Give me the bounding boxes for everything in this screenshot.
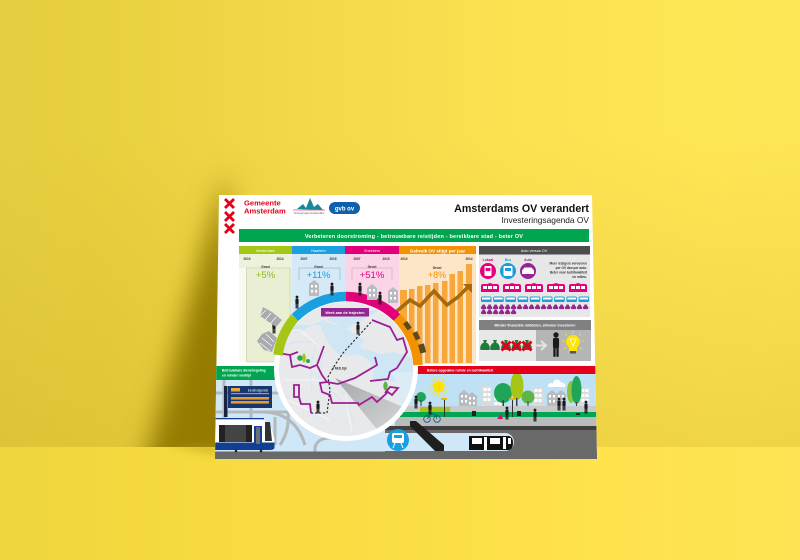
icon: metro badge <box>387 429 409 451</box>
icon: money bags <box>480 340 532 350</box>
label: Werk aan de trajecten: Werk aan de trajecten <box>325 311 365 315</box>
illustration: solar panel in lime column <box>260 307 282 327</box>
sky <box>405 374 600 414</box>
background: yellow wall <box>0 0 800 448</box>
pictogram: row of buses <box>481 296 589 302</box>
arrow <box>535 341 546 350</box>
logo: GVB pill: gvb ov <box>335 206 355 212</box>
grass <box>400 412 600 417</box>
pictogram: rows of cars <box>481 304 588 314</box>
icon: sun <box>428 377 448 397</box>
panel: Gebruik OV bar chart <box>396 246 476 364</box>
street scene <box>385 372 600 460</box>
bottom grey strip <box>210 452 602 460</box>
icon: tram: Lokaal <box>483 258 493 262</box>
street lines <box>280 330 395 432</box>
panel: Haarlem column: 2015 <box>329 257 337 261</box>
text: explanation: Meer reizigers vervoeren <box>549 262 587 266</box>
panel: Haarlem column: Groei <box>314 265 323 269</box>
subtitle: Investeringsagenda OV <box>501 215 589 225</box>
trend arrow <box>396 286 469 312</box>
panel: Minder financiële middelen <box>479 320 591 361</box>
panel: Betrouwbare dienstregeling label: Betrouwbare dienstregeling <box>222 368 266 372</box>
panel: Sneeker column: +51% <box>360 270 385 281</box>
panel: Haarlem column: 2007 <box>300 257 308 261</box>
cloud <box>548 379 565 387</box>
pictogram: row of trams <box>481 283 587 292</box>
green banner <box>239 229 589 242</box>
water <box>319 322 414 382</box>
dark road edge <box>385 426 600 430</box>
canals <box>285 341 355 425</box>
icon: car: Auto <box>524 258 532 262</box>
icon: person <box>553 332 559 357</box>
illustration: blue and white tram <box>210 418 274 452</box>
panel: Sneeker column: 2015 <box>382 257 390 261</box>
tram stop display board: Eerstvolgende <box>248 388 268 392</box>
panel: Gebruik OV bar chart: Groei <box>433 266 441 270</box>
illustration: people on ring in blue column <box>295 280 334 308</box>
panel: Westerdam column <box>239 246 292 362</box>
people and street furniture <box>414 396 588 422</box>
title: Amsterdams OV verandert <box>454 203 589 215</box>
left city scene: roads and tram stop <box>215 379 405 452</box>
trees <box>416 374 582 406</box>
ring: four coloured arcs <box>278 296 418 365</box>
poster <box>210 190 602 465</box>
buildings <box>459 386 590 406</box>
illustration: metro train <box>469 436 513 450</box>
logo: GVB pill <box>329 202 360 214</box>
background: yellow floor <box>0 447 800 560</box>
logo: Gemeente Amsterdam: Amsterdam <box>244 206 286 216</box>
text: explanation: Beter voor luchtkwaliteit <box>550 270 588 274</box>
tram stop display board <box>224 386 272 417</box>
panel: Auto versus OV <box>479 246 590 317</box>
panel: Gebruik OV bar chart: 2010 <box>400 257 408 261</box>
pavement <box>395 417 600 426</box>
dashed metro route <box>311 321 372 413</box>
panel: Betrouwbare dienstregeling label: en minder rondrijd <box>222 374 251 378</box>
trajectory lines <box>278 320 407 413</box>
panel: Minder financiële middelen: Minder financiële middelen, slimmer investeren <box>495 324 575 328</box>
illustration: trams on orange ring <box>403 321 426 354</box>
panel: Gebruik OV bar chart: +8% <box>428 270 446 280</box>
banner: Betere opgedane ruimte <box>414 366 599 374</box>
text: explanation <box>550 262 587 278</box>
panel: Sneeker column: Groei <box>368 265 376 269</box>
logo: Gemeente Amsterdam: Gemeente <box>244 198 281 208</box>
label: distance: 4 MIJLtijk <box>332 366 347 370</box>
illustration: people on ring in magenta column <box>358 283 398 304</box>
grey street behind the grass <box>405 406 600 412</box>
bars <box>400 264 472 363</box>
banner: Betere opgedane ruimte: Betere opgedane ruimte en luchtkwaliteit <box>427 368 494 372</box>
panel: Auto versus OV: Auto versus OV <box>521 249 548 253</box>
panel: Westerdam column: +5% <box>256 270 276 281</box>
icon: walking people on map <box>316 322 360 414</box>
panel: Betrouwbare dienstregeling label <box>215 366 277 380</box>
icon: bus: Bus <box>505 258 511 262</box>
shadow of the poster on the wall <box>133 176 242 447</box>
cone of view <box>335 378 403 433</box>
logo: Vervoerregio skyline: Vervoerregio Amsterdam <box>294 211 325 215</box>
panel: central map circle <box>274 297 418 441</box>
illustration: solar panel on left of ring <box>257 321 277 352</box>
panel: Sneeker column <box>345 246 399 320</box>
shadow of the poster on the floor <box>165 445 217 455</box>
panel: Westerdam column: Westerdam <box>256 249 275 253</box>
icon: light bulb <box>562 331 584 354</box>
cyclist <box>424 402 440 422</box>
escalator <box>410 421 444 451</box>
green banner: Verbeteren doorstroming - betrouwbare reistijden - bereikbare stad - beter OV <box>305 234 523 240</box>
panel: Gebruik OV bar chart: 2014 <box>465 257 473 261</box>
label: Werk aan de trajecten <box>321 308 369 316</box>
text: explanation: en milieu. <box>572 275 587 279</box>
logo: Gemeente Amsterdam <box>244 200 286 214</box>
panel: Westerdam column: Groei <box>261 265 270 269</box>
land in the water <box>360 341 395 354</box>
logo: three red crosses <box>225 199 234 233</box>
panel: Westerdam column: 2010 <box>243 257 251 261</box>
panel: Sneeker column: 2007 <box>353 257 361 261</box>
metro tunnel <box>385 433 514 451</box>
panel: Sneeker column: Sneekers <box>364 249 380 253</box>
panel: Haarlem column <box>292 246 345 314</box>
icon: trees on map <box>297 354 388 390</box>
panel: Gebruik OV bar chart: Gebruik OV stijgt per jaar <box>410 248 465 254</box>
text: explanation: per OV dan per auto. <box>556 266 587 270</box>
underground <box>385 430 600 460</box>
panel: Haarlem column: +11% <box>307 270 331 281</box>
panel: Westerdam column: 2014 <box>276 257 284 261</box>
panel: Haarlem column: Haarlem <box>311 249 326 253</box>
logo: Vervoerregio skyline <box>293 198 325 215</box>
